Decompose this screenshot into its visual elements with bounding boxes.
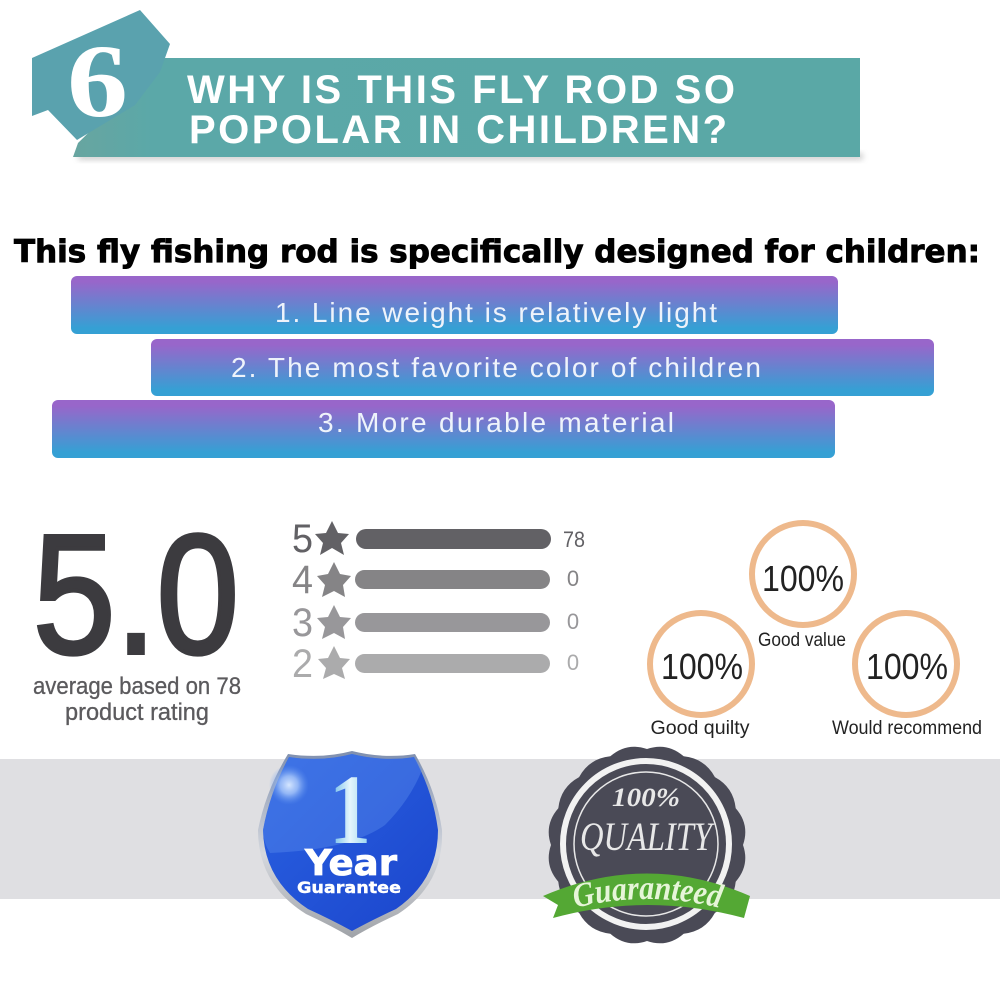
row: 5 stars [292, 517, 585, 561]
seal scalloped edge [549, 747, 745, 943]
badge: 1 year guarantee shield [258, 751, 442, 938]
ribbon text: Guaranteed [574, 881, 726, 908]
banner title [187, 68, 735, 152]
seal text: 100%: 100% [612, 783, 680, 812]
row: 5 stars: 78 [563, 527, 585, 552]
numeral 1: 1 [329, 754, 371, 865]
satisfaction circle: good value: 100% [762, 558, 844, 599]
year label: Year [304, 843, 397, 884]
guarantee label: Guarantee [297, 878, 401, 897]
satisfaction circle: good quality: Good quilty [650, 718, 750, 739]
row: 4 stars [292, 558, 579, 602]
satisfaction circle: good value [752, 523, 854, 651]
step number: 6 [67, 24, 128, 139]
heading: This fly fishing rod is specifically designed for children: [14, 234, 980, 270]
satisfaction circle: good value: Good value [758, 630, 846, 651]
satisfaction circle: good quality: 100% [661, 646, 743, 687]
seal text: quality: QUALITY [580, 814, 715, 859]
title banner [32, 10, 863, 160]
banner shadow [78, 153, 863, 160]
badge: 100% quality seal [543, 746, 750, 944]
banner title: WHY IS THIS FLY ROD SO [187, 68, 735, 112]
shield face [263, 754, 438, 931]
rating breakdown chart [292, 517, 585, 686]
row: 2 stars: 0 [567, 650, 579, 675]
seal rings [563, 761, 729, 927]
grey background band [0, 759, 1000, 899]
feature bar 2 [151, 339, 934, 396]
row: 3 stars: 0 [567, 609, 579, 634]
green ribbon [543, 874, 750, 918]
shield gloss [263, 754, 422, 853]
banner title: POPOLAR IN CHILDREN? [189, 108, 727, 152]
row: 2 stars [292, 642, 579, 686]
score caption: average based on 78 [33, 673, 241, 700]
score number: 5.0 [33, 500, 239, 690]
shield frame [258, 751, 442, 938]
feature bar 3 [52, 400, 835, 458]
satisfaction circle: would recommend: Would recommend [832, 718, 982, 739]
overall score [33, 500, 241, 726]
row: 3 stars [292, 601, 579, 645]
row: 4 stars: 0 [567, 566, 579, 591]
row: 3 stars: 3 [292, 601, 313, 645]
feature bar 1: 1. Line weight is relatively light [275, 297, 717, 328]
feature bar 2: 2. The most favorite color of children [231, 352, 761, 383]
feature bar 3: 3. More durable material [318, 407, 674, 438]
row: 2 stars: 2 [292, 642, 313, 686]
satisfaction circle: good quality [650, 613, 752, 739]
number tab [32, 10, 170, 140]
row: 5 stars: 5 [292, 517, 313, 561]
overall score: product rating [65, 699, 209, 726]
feature bar 1 [71, 276, 838, 334]
row: 4 stars: 4 [292, 558, 313, 602]
satisfaction circle: would recommend [832, 613, 982, 739]
banner ribbon [73, 58, 860, 157]
shield highlight [269, 765, 309, 805]
satisfaction circle: would recommend: 100% [866, 646, 948, 687]
